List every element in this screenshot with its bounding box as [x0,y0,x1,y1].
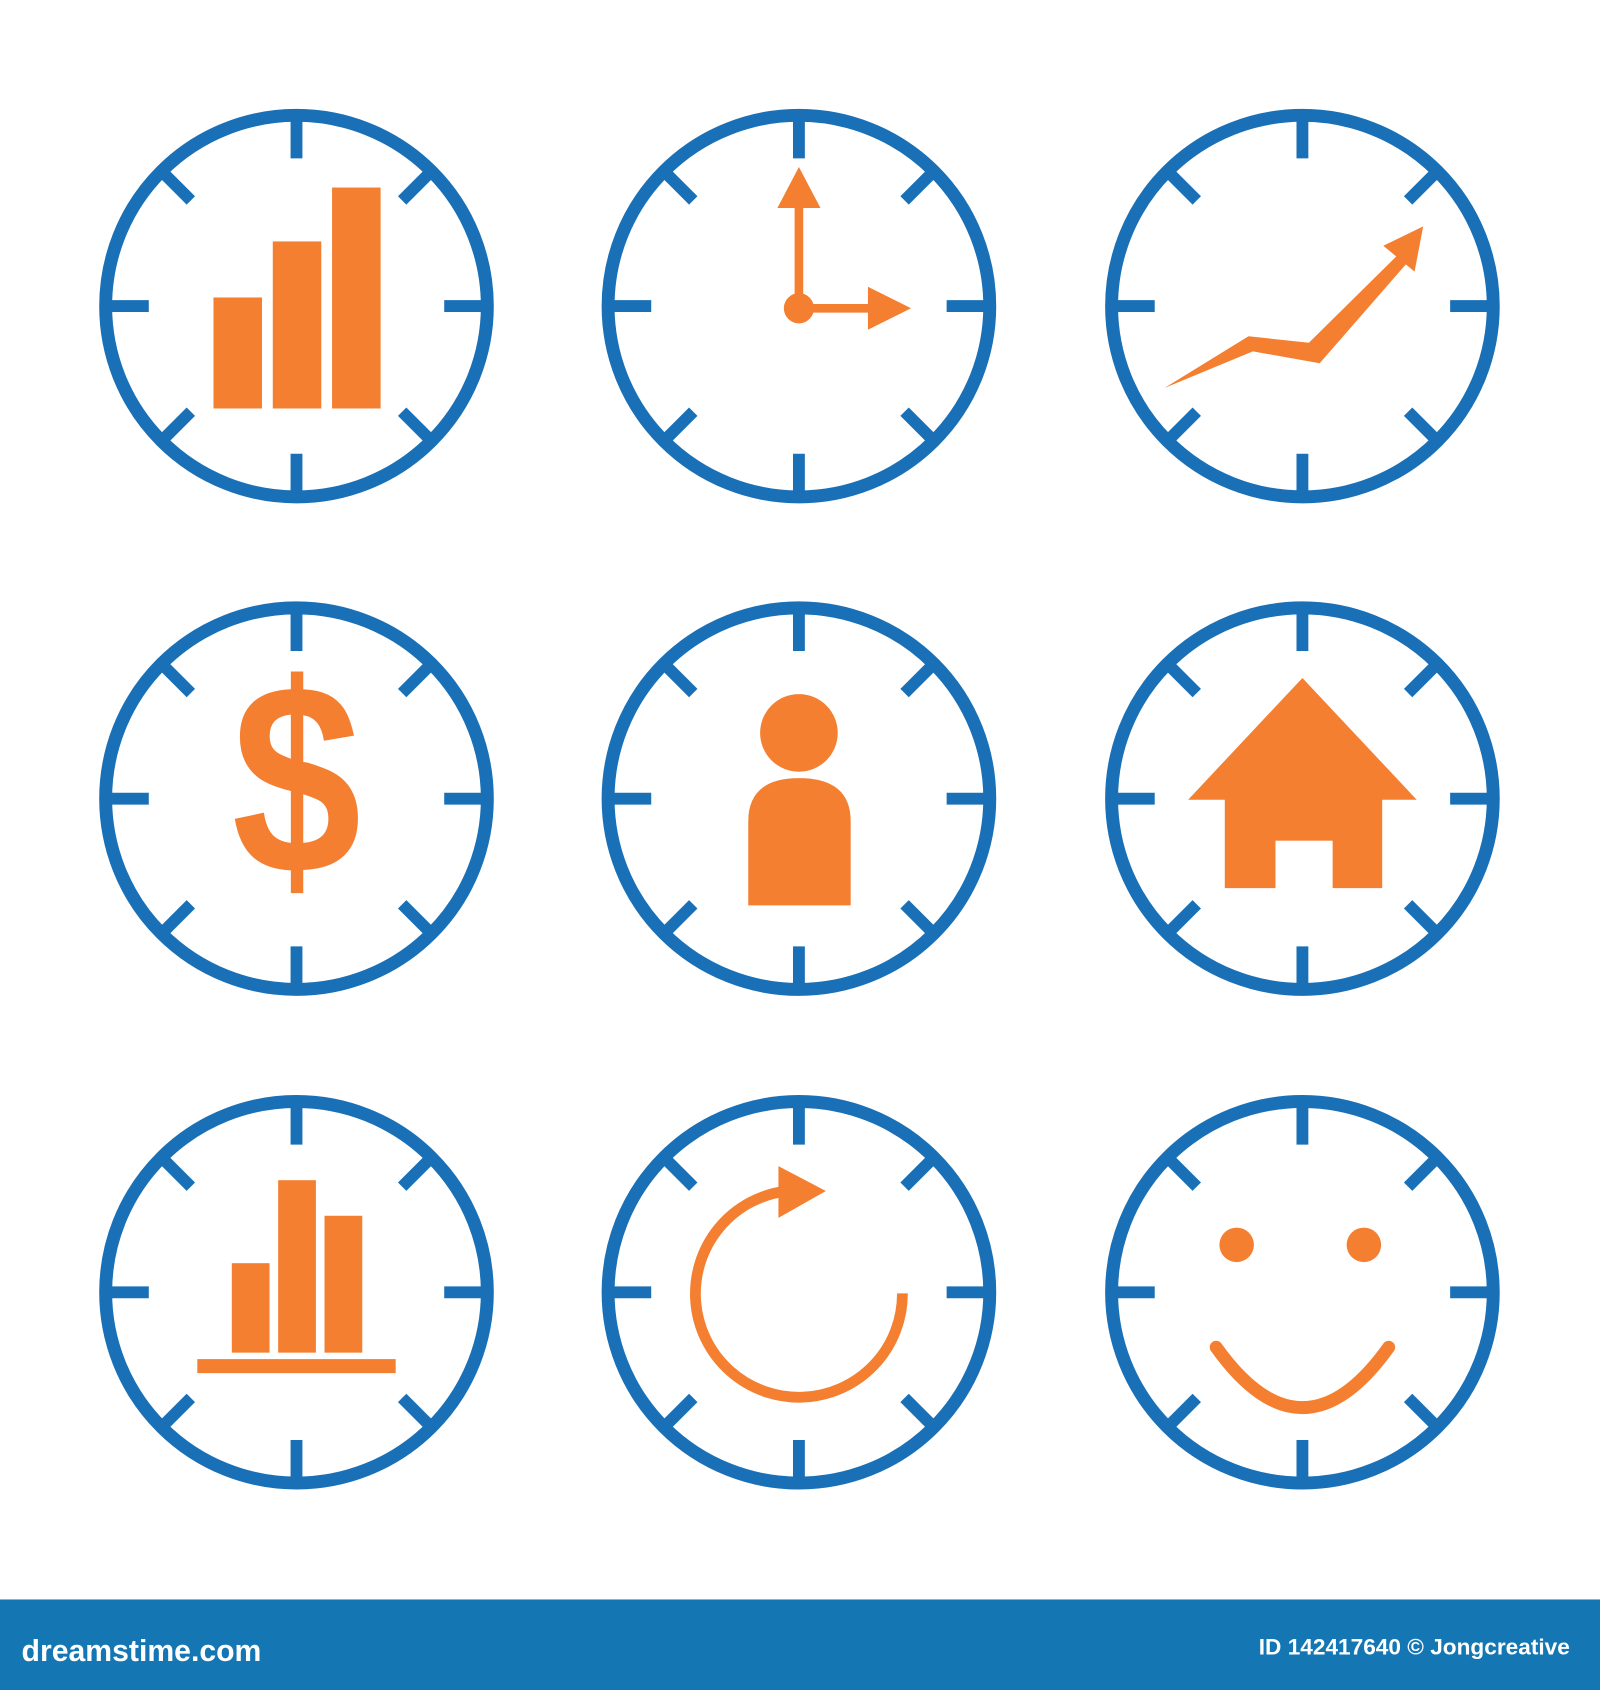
footer bar [0,1599,1600,1690]
footer bar: ID 142417640 © Jongcreative [1259,1634,1570,1659]
icon: dollar: $ [232,627,361,931]
icon: person [608,608,990,989]
icon: refresh arrow [608,1102,990,1483]
icon: bar chart with base [106,1102,487,1483]
icon: clock hands [608,115,990,497]
icon: house [1112,608,1493,989]
icon: dollar [106,608,487,989]
icon: growth arrow [1112,115,1493,497]
icon: smiley [1112,1102,1493,1483]
icon: bar chart clock [106,115,487,497]
footer bar: dreamstime.com [22,1635,261,1668]
